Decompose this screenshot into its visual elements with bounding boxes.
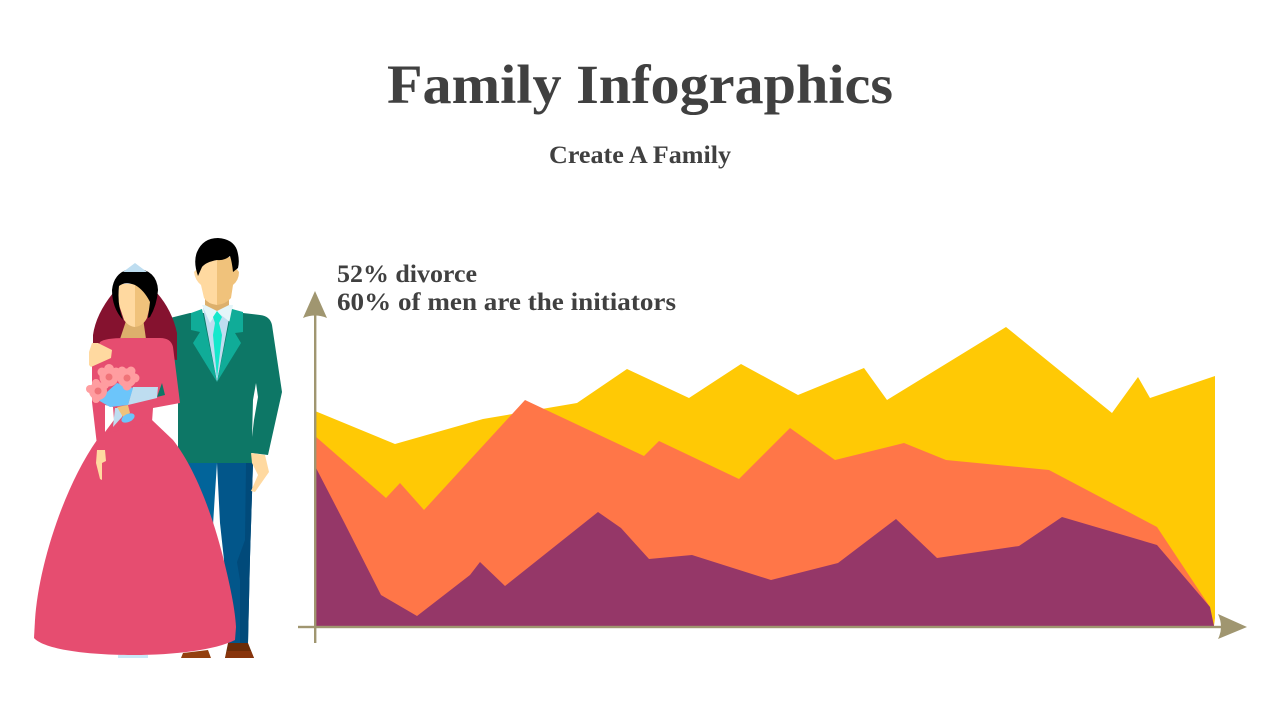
blue wrap bbox=[98, 383, 133, 407]
tiara bbox=[123, 263, 147, 272]
groom bbox=[170, 238, 282, 658]
vertical axis arrow bbox=[303, 291, 327, 643]
bride lower hand bbox=[96, 450, 106, 480]
groom trousers bbox=[186, 463, 253, 643]
bride neck bbox=[120, 318, 146, 339]
stat line: divorce: 52% divorce bbox=[337, 261, 477, 288]
bouquet bbox=[86, 364, 165, 427]
bride shoes bbox=[118, 655, 148, 658]
title: Family Infographics bbox=[387, 54, 893, 115]
lower paper bbox=[113, 408, 124, 427]
purple area series bbox=[315, 466, 1214, 626]
groom shoes bbox=[181, 643, 254, 658]
flower 1 bbox=[98, 364, 120, 386]
stat line: initiators: 60% of men are the initiators bbox=[337, 289, 676, 316]
area chart bbox=[298, 291, 1247, 643]
veil bbox=[93, 293, 177, 360]
bride hair bbox=[112, 268, 158, 320]
groom neck bbox=[205, 295, 229, 311]
groom hand bbox=[251, 453, 269, 492]
orange area series bbox=[315, 400, 1214, 626]
jacket seen through arm bbox=[157, 383, 165, 397]
horizontal axis arrow bbox=[298, 614, 1247, 639]
man's hand on shoulder bbox=[89, 343, 112, 367]
flower 3 bbox=[86, 379, 109, 403]
flower 2 bbox=[118, 366, 140, 390]
ribbon bbox=[120, 411, 136, 425]
bride bbox=[34, 263, 236, 658]
shirt bbox=[203, 308, 231, 382]
groom jacket bbox=[170, 313, 282, 463]
tie bbox=[213, 311, 222, 378]
groom hair bbox=[195, 238, 239, 276]
statistics text bbox=[337, 261, 676, 316]
yellow area series bbox=[315, 327, 1215, 626]
groom face bbox=[194, 255, 239, 305]
lapels bbox=[191, 309, 243, 382]
subtitle: Create A Family bbox=[549, 142, 732, 169]
jacket side slit bbox=[252, 383, 258, 437]
illustration: bride and groom bbox=[34, 238, 282, 658]
paper wrap bbox=[128, 387, 158, 405]
gap between arm and waist bbox=[105, 405, 114, 432]
collar bbox=[202, 305, 233, 323]
hand on bouquet bbox=[117, 405, 130, 417]
skirt bbox=[34, 420, 236, 655]
bride face bbox=[118, 284, 151, 327]
bodice and sleeves bbox=[92, 338, 180, 445]
